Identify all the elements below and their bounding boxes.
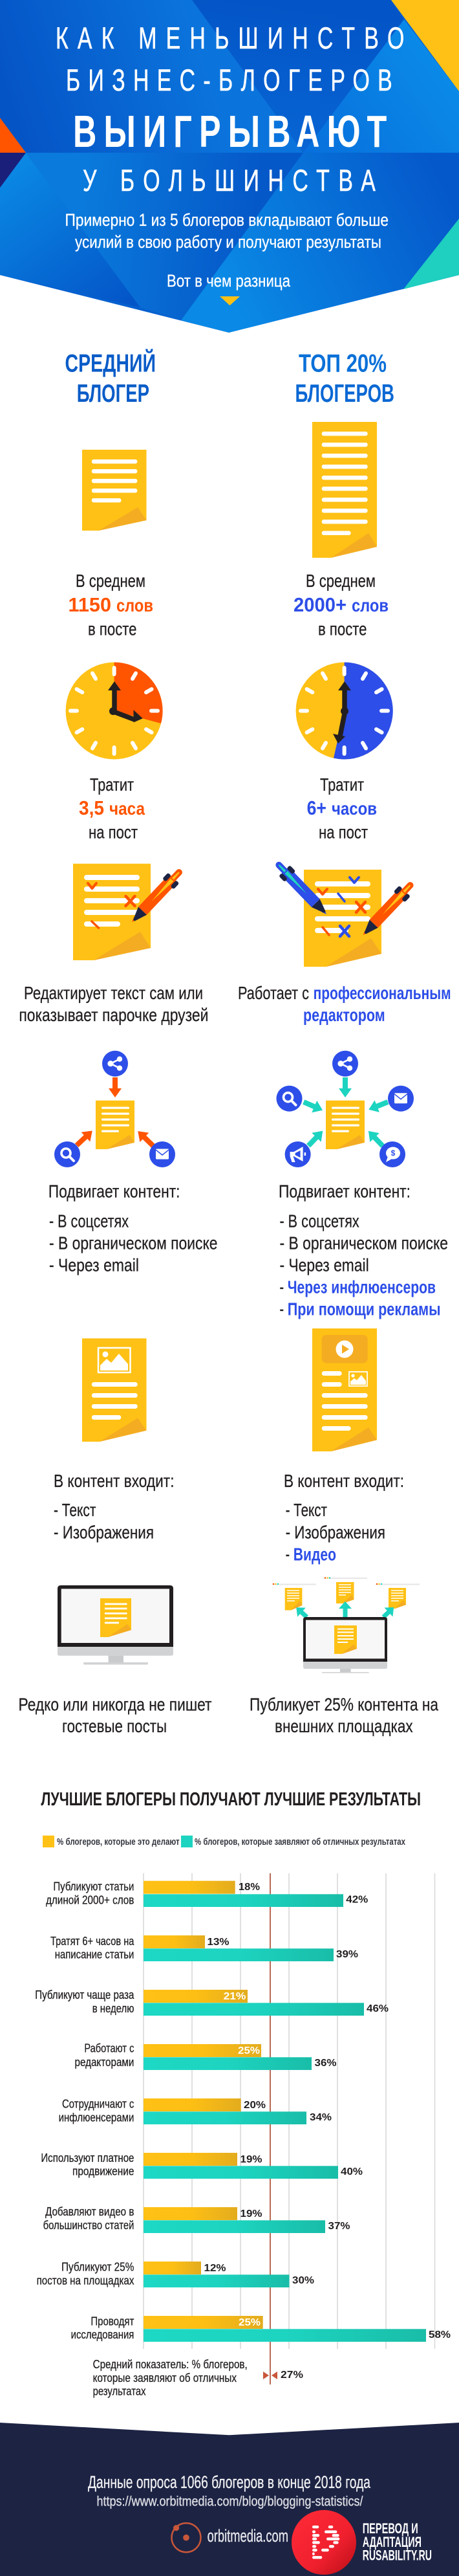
heading: average blogger: БЛОГЕР (77, 380, 149, 408)
average callout: результатах (93, 2385, 146, 2398)
text: promotion list left: - В соцсетях (49, 1211, 129, 1231)
text: time right (307, 775, 377, 842)
icon: edited document with two pens (271, 857, 418, 967)
subtitle: Примерно 1 из 5 блогеров вкладывают больше (65, 210, 389, 230)
icon: megaphone (285, 1141, 311, 1167)
text: editing left: показывает парочке друзей (19, 1005, 208, 1025)
text: promotion list left: Подвигает контент: (48, 1182, 180, 1202)
logo: orbitmedia (172, 2523, 288, 2552)
text: words left: слов (116, 595, 153, 615)
title: ВЫИГРЫВАЮТ (73, 106, 387, 157)
row: paid promotion: Используют платное (41, 2152, 134, 2164)
row: video: 37% (328, 2221, 350, 2232)
row: guest posts: 30% (292, 2275, 314, 2286)
text: words left: 1150 (69, 593, 111, 616)
logo: orbitmedia: orbitmedia.com (208, 2526, 288, 2546)
header banner (0, 0, 459, 333)
legend (43, 1836, 405, 1847)
heading: top 20% bloggers: ТОП 20% (299, 350, 387, 378)
heading: average blogger (65, 349, 156, 408)
text: time left: на пост (89, 822, 138, 842)
text: time right: 6+ (307, 797, 326, 819)
text: words left (69, 571, 153, 639)
text: editing right (238, 983, 451, 1025)
icon: clock 3.5 hours (66, 663, 163, 760)
average callout: 27% (281, 2370, 303, 2381)
icon: dollar bubble (379, 1141, 405, 1167)
row: 2000+ words: 18% (239, 1882, 260, 1893)
row: research (71, 2315, 451, 2342)
row: publish weekly (35, 1988, 389, 2016)
text: content list right: - Изображения (286, 1522, 385, 1542)
heading: top 20% bloggers: БЛОГЕРОВ (295, 380, 394, 408)
text: content list right: - Текст (286, 1500, 327, 1520)
row: paid promotion: 40% (341, 2166, 363, 2177)
diagram: three promotion channels (54, 1051, 175, 1167)
row: publish weekly: 46% (367, 2003, 389, 2014)
row: 2000+ words (46, 1880, 368, 1907)
row: editors: 36% (314, 2058, 336, 2069)
text: content list left: - Изображения (54, 1522, 154, 1542)
text: time right: на пост (319, 822, 368, 842)
text: content list left: В контент входит: (54, 1471, 175, 1491)
text: words right: В среднем (306, 571, 376, 591)
icon: clock 6+ hours (296, 662, 393, 760)
text: promotion list right: Подвигает контент: (279, 1182, 411, 1202)
icon: short document (82, 450, 146, 531)
bar chart (35, 1873, 451, 2384)
row: 2000+ words: длиной 2000+ слов (46, 1894, 134, 1907)
text: words right (294, 571, 389, 639)
row: paid promotion: 19% (240, 2154, 262, 2165)
footer source (88, 2472, 371, 2509)
text: time right: Тратит (320, 775, 364, 795)
text: promotion list right (279, 1182, 448, 1319)
average callout (93, 2358, 303, 2398)
icon: document with video and image (312, 1328, 377, 1451)
text: promotion list right: - Через email (279, 1255, 369, 1275)
icon: down triangle (220, 296, 240, 305)
text: time left (79, 775, 145, 842)
logo: rusability: АДАПТАЦИЯ (363, 2534, 422, 2550)
subtitle (65, 210, 389, 252)
row: research: 58% (429, 2329, 451, 2340)
row: 2000+ words: Публикуют статьи (53, 1880, 134, 1893)
lead-in text: Вот в чем разница (167, 271, 291, 291)
row: influencers: 34% (310, 2112, 332, 2123)
row: guest posts: постов на площадках (37, 2274, 134, 2287)
text: content list right: В контент входит: (284, 1471, 404, 1491)
text: editing left (19, 983, 208, 1025)
average line (270, 1873, 271, 2384)
row: 6+ hours (50, 1935, 358, 1961)
text: promotion list right: - В соцсетях (279, 1211, 359, 1231)
row: research: исследования (71, 2328, 134, 2341)
row: video: Добавляют видео в (45, 2205, 134, 2218)
title: БИЗНЕС-БЛОГЕРОВ (66, 63, 392, 97)
row: editors: Работают с (84, 2042, 134, 2055)
text: promotion list left: - Через email (49, 1255, 139, 1275)
row: video: большинство статей (43, 2219, 134, 2232)
text: time right: часов (332, 798, 377, 819)
row: editors: 25% (238, 2045, 260, 2056)
grid (144, 1873, 434, 2349)
logo: rusability: ПЕРЕВОД И (363, 2520, 418, 2537)
browser bars (272, 1577, 420, 1585)
icon: document with image (82, 1338, 146, 1442)
diagram: five promotion channels (277, 1051, 414, 1167)
text: guest posts left: Редко или никогда не пишет (18, 1695, 212, 1715)
text: words right: слов (352, 595, 389, 615)
icon: monitor with document (58, 1585, 173, 1664)
title: У БОЛЬШИНСТВА (83, 164, 376, 197)
text: content list right: Видео (294, 1544, 336, 1564)
icon: long document (312, 422, 377, 558)
text: promotion list right: - (279, 1299, 284, 1319)
footer band (0, 2423, 459, 2576)
row: video (43, 2205, 350, 2233)
teal right triangle (403, 219, 459, 289)
row: 6+ hours: 13% (207, 1937, 229, 1948)
text: words right: в посте (318, 619, 367, 639)
row: 6+ hours: 39% (336, 1949, 358, 1960)
subtitle: усилий в свою работу и получают результаты (75, 232, 381, 252)
text: content list right (284, 1471, 404, 1564)
text: editing left: Редактирует текст сам или (24, 983, 203, 1003)
row: guest posts (37, 2260, 314, 2287)
icon: edited document with one pen (73, 864, 187, 960)
row: publish weekly: 21% (224, 1991, 246, 2002)
icon: monitor publishing to three sites (272, 1577, 420, 1673)
orange left triangle (0, 118, 26, 153)
row: influencers: Сотрудничают с (62, 2098, 134, 2111)
row: influencers (59, 2098, 332, 2124)
heading: average blogger: СРЕДНИЙ (65, 349, 156, 378)
row: publish weekly: Публикуют чаще раза (35, 1988, 134, 2001)
text: promotion list left (48, 1182, 217, 1275)
row: guest posts: Публикуют 25% (61, 2260, 134, 2273)
heading: top 20% bloggers (295, 350, 394, 408)
yellow corner triangle (391, 0, 459, 91)
row: publish weekly: в неделю (92, 2002, 134, 2015)
legend: % блогеров, которые это делают (57, 1837, 180, 1847)
text: time left: Тратит (90, 775, 134, 795)
text: words left: в посте (88, 619, 137, 639)
row: 2000+ words: 42% (346, 1894, 368, 1905)
row: 6+ hours: Тратят 6+ часов на (50, 1935, 134, 1948)
text: guest posts left: гостевые посты (62, 1716, 167, 1736)
row: editors: редакторами (75, 2056, 134, 2069)
row: influencers: 20% (244, 2100, 266, 2111)
navy left triangle (0, 153, 26, 188)
icon: dollar bubble: $ (391, 1149, 396, 1158)
average callout: Средний показатель: % блогеров, (93, 2358, 248, 2371)
row: video: 19% (240, 2208, 262, 2219)
text: time left: часа (109, 798, 145, 819)
row: research: 25% (239, 2317, 261, 2328)
row: paid promotion (41, 2152, 363, 2179)
text: content list right: - (286, 1544, 290, 1564)
text: promotion list left: - В органическом поиске (49, 1233, 217, 1253)
title: КАК МЕНЬШИНСТВО (56, 21, 404, 55)
row: 6+ hours: написание статьи (55, 1948, 134, 1961)
text: editing right: редактором (303, 1005, 385, 1025)
text: editing right: Работает с (238, 983, 309, 1003)
logo: rusability (292, 2510, 432, 2575)
row: paid promotion: продвижение (72, 2165, 134, 2178)
row: research: Проводят (91, 2315, 134, 2328)
title (56, 21, 404, 197)
text: content list left: - Текст (54, 1500, 96, 1520)
text: content list left (54, 1471, 175, 1542)
text: promotion list right: - (279, 1277, 284, 1297)
row: influencers: инфлюенсерами (59, 2111, 134, 2124)
legend: % блогеров, которые заявляют об отличных результатах (195, 1837, 405, 1847)
footer source: https://www.orbitmedia.com/blog/blogging-statistics/ (97, 2494, 363, 2509)
text: words left: В среднем (76, 571, 145, 591)
text: words right: 2000+ (294, 593, 347, 616)
row: editors (75, 2042, 336, 2070)
text: guest posts right: внешних площадках (275, 1716, 413, 1736)
row: guest posts: 12% (204, 2263, 226, 2274)
text: guest posts left (18, 1695, 212, 1736)
text: time left: 3,5 (79, 797, 104, 819)
text: guest posts right (250, 1695, 438, 1736)
average callout: которые заявляют об отличных (93, 2372, 237, 2384)
